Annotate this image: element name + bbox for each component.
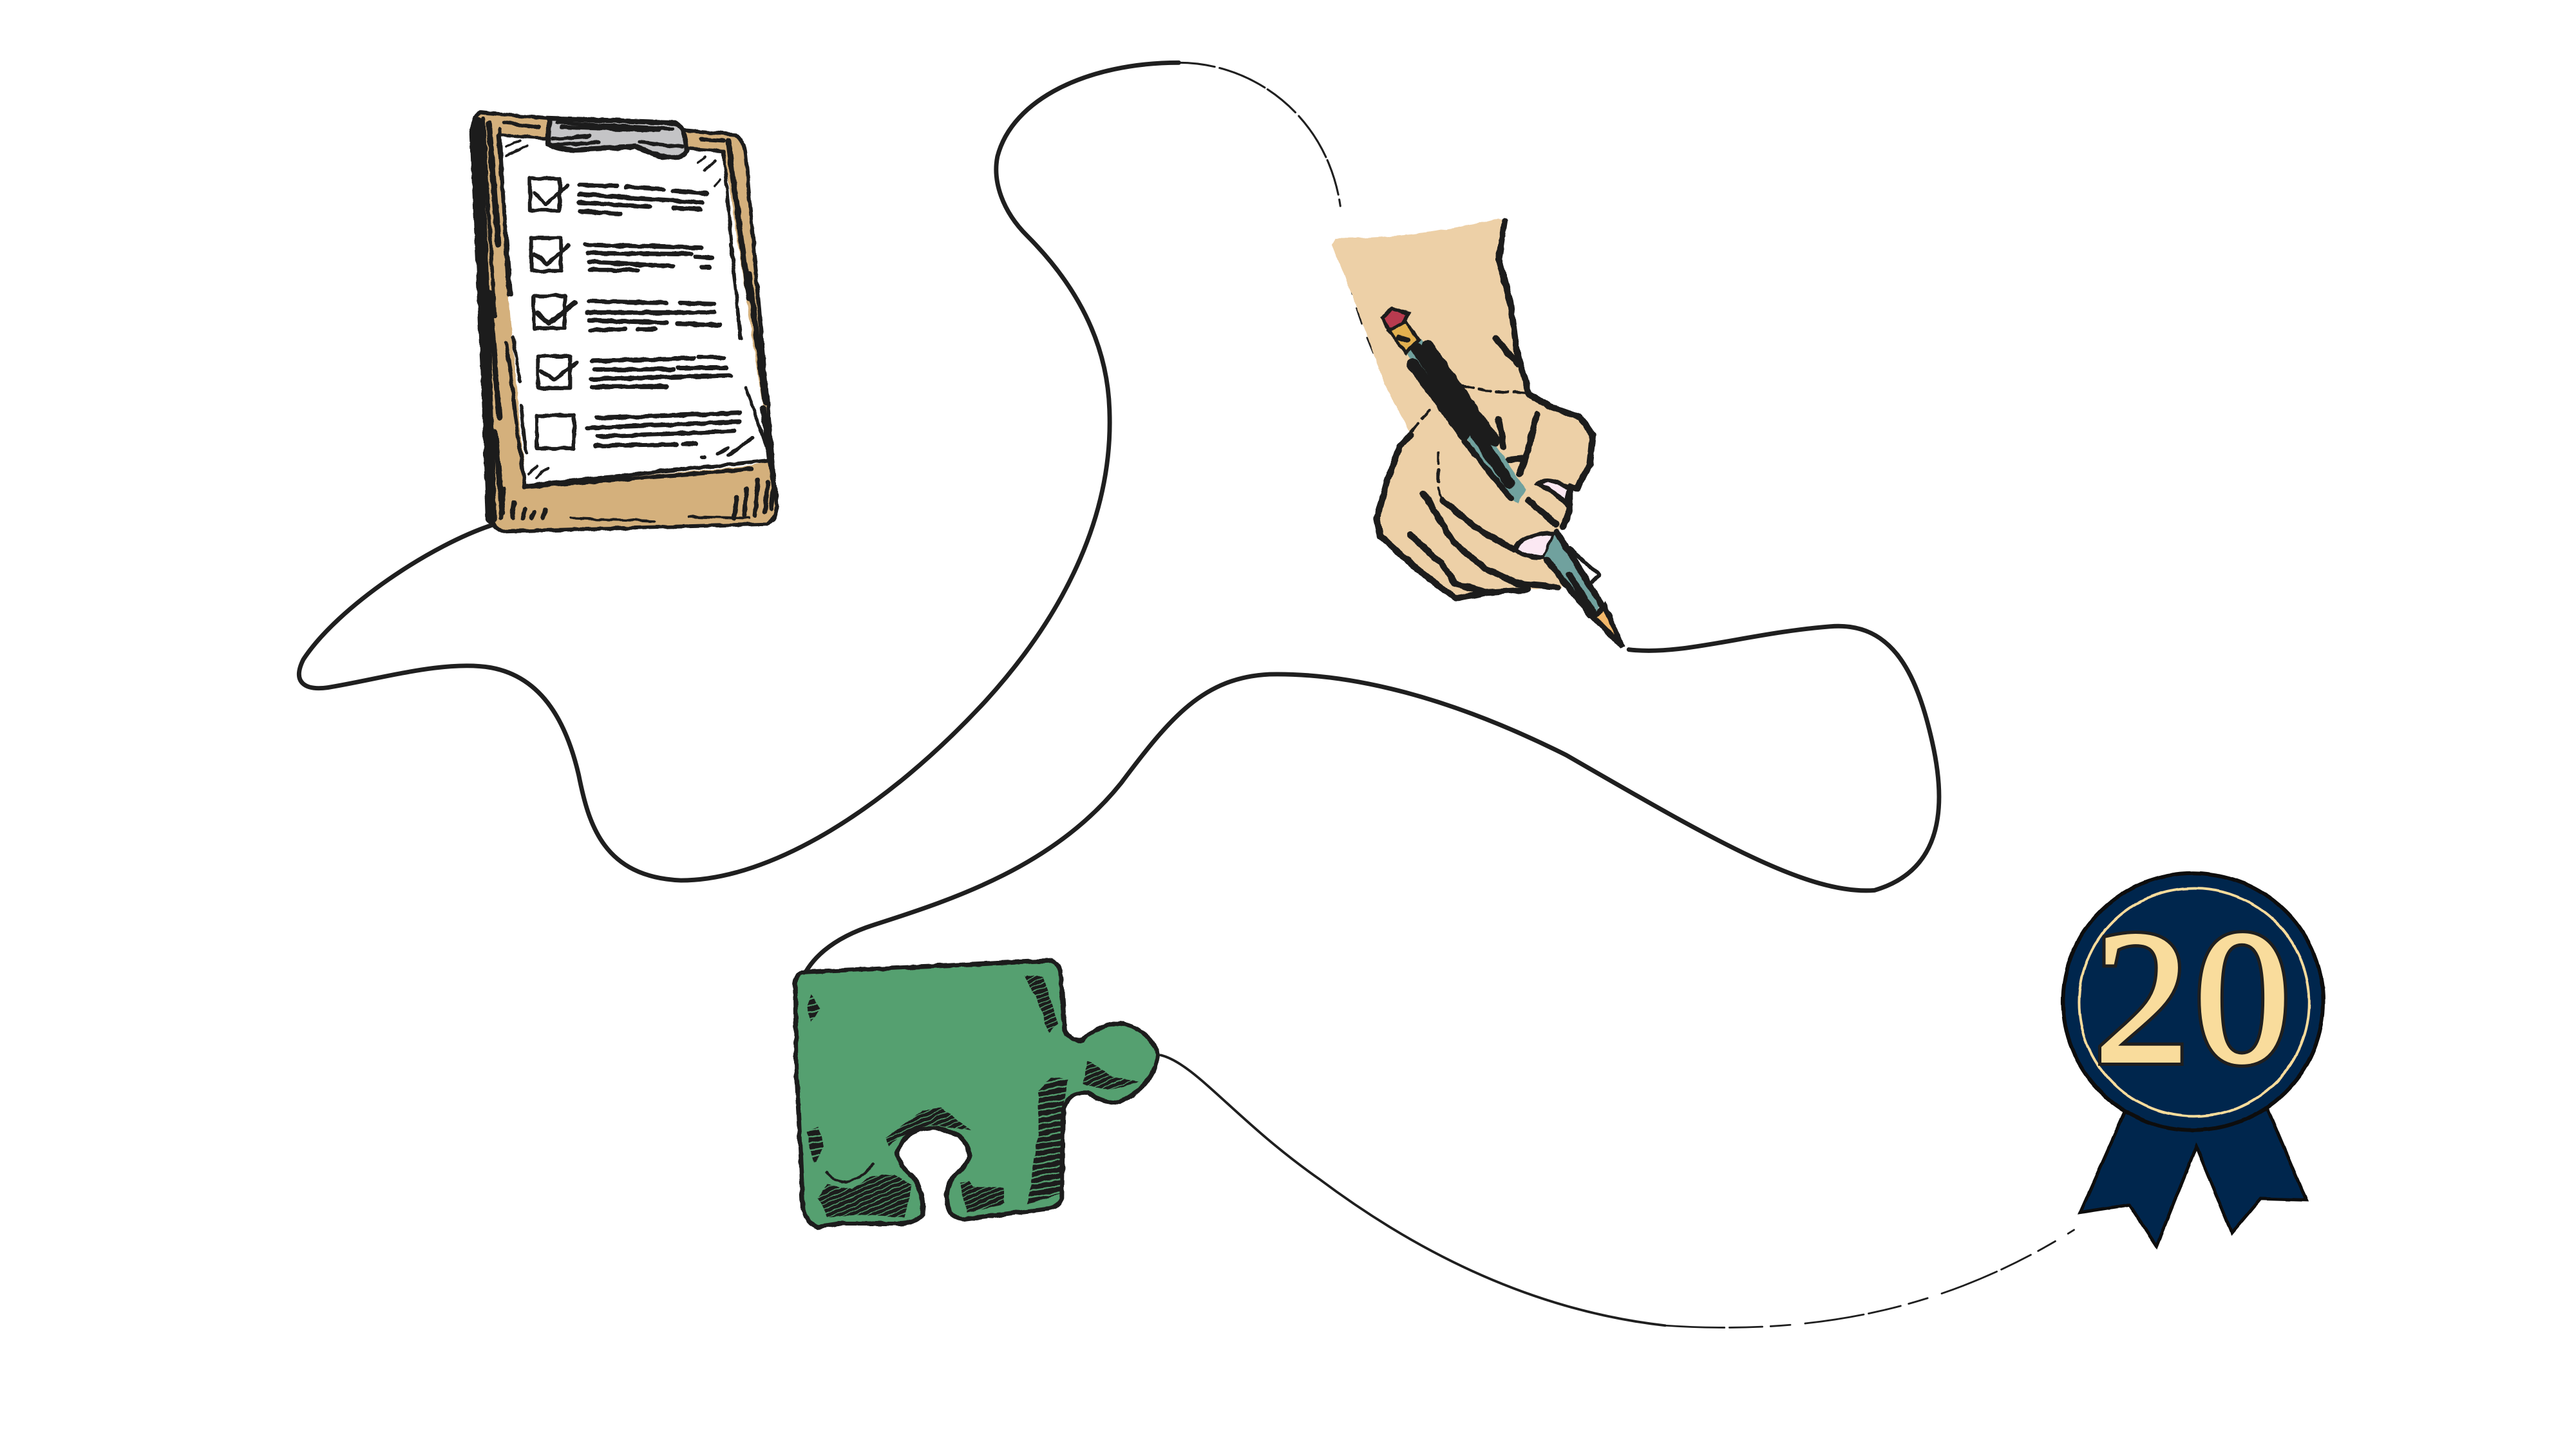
item 2 <box>532 238 712 271</box>
arrow: path from puzzle piece to ribbon <box>1160 1055 2074 1327</box>
clipboard outline and shading <box>471 113 777 531</box>
hand skin <box>1332 218 1593 598</box>
arrow: path from pencil to puzzle piece <box>800 626 1939 986</box>
hand outline <box>1377 221 1593 598</box>
eraser <box>1382 308 1408 330</box>
icon: hand writing with pencil <box>1332 218 1622 646</box>
ribbon tails <box>2080 1108 2306 1245</box>
clipboard board <box>471 113 777 533</box>
checklist <box>530 178 740 448</box>
pencil lower shading <box>1547 531 1602 615</box>
icon: ribbon badge <box>2063 873 2324 1245</box>
item 4 <box>538 356 730 388</box>
icon: green puzzle piece <box>795 961 1158 1227</box>
pencil lower <box>1544 531 1602 616</box>
clip shading <box>553 123 682 147</box>
medal ring <box>2079 889 2309 1116</box>
arrow: path from clipboard to hand <box>299 62 1381 880</box>
medal disc <box>2063 873 2324 1130</box>
icon: clipboard checklist <box>471 113 777 533</box>
pencil tip <box>1594 606 1622 646</box>
badge number: 20 <box>2094 892 2295 1103</box>
badge number: 20 <box>2094 892 2295 1103</box>
item 5 <box>537 413 740 448</box>
ferrule <box>1389 322 1419 353</box>
paper sheet <box>498 133 771 486</box>
pencil body <box>1407 338 1526 504</box>
pencil shading <box>1412 346 1509 482</box>
puzzle body <box>795 961 1158 1227</box>
wrist detail <box>1410 386 1528 500</box>
item 1 <box>530 178 707 214</box>
clip <box>548 118 687 157</box>
item 3 <box>534 296 720 330</box>
puzzle hatching <box>807 976 1141 1217</box>
thumbnails <box>1515 480 1569 558</box>
